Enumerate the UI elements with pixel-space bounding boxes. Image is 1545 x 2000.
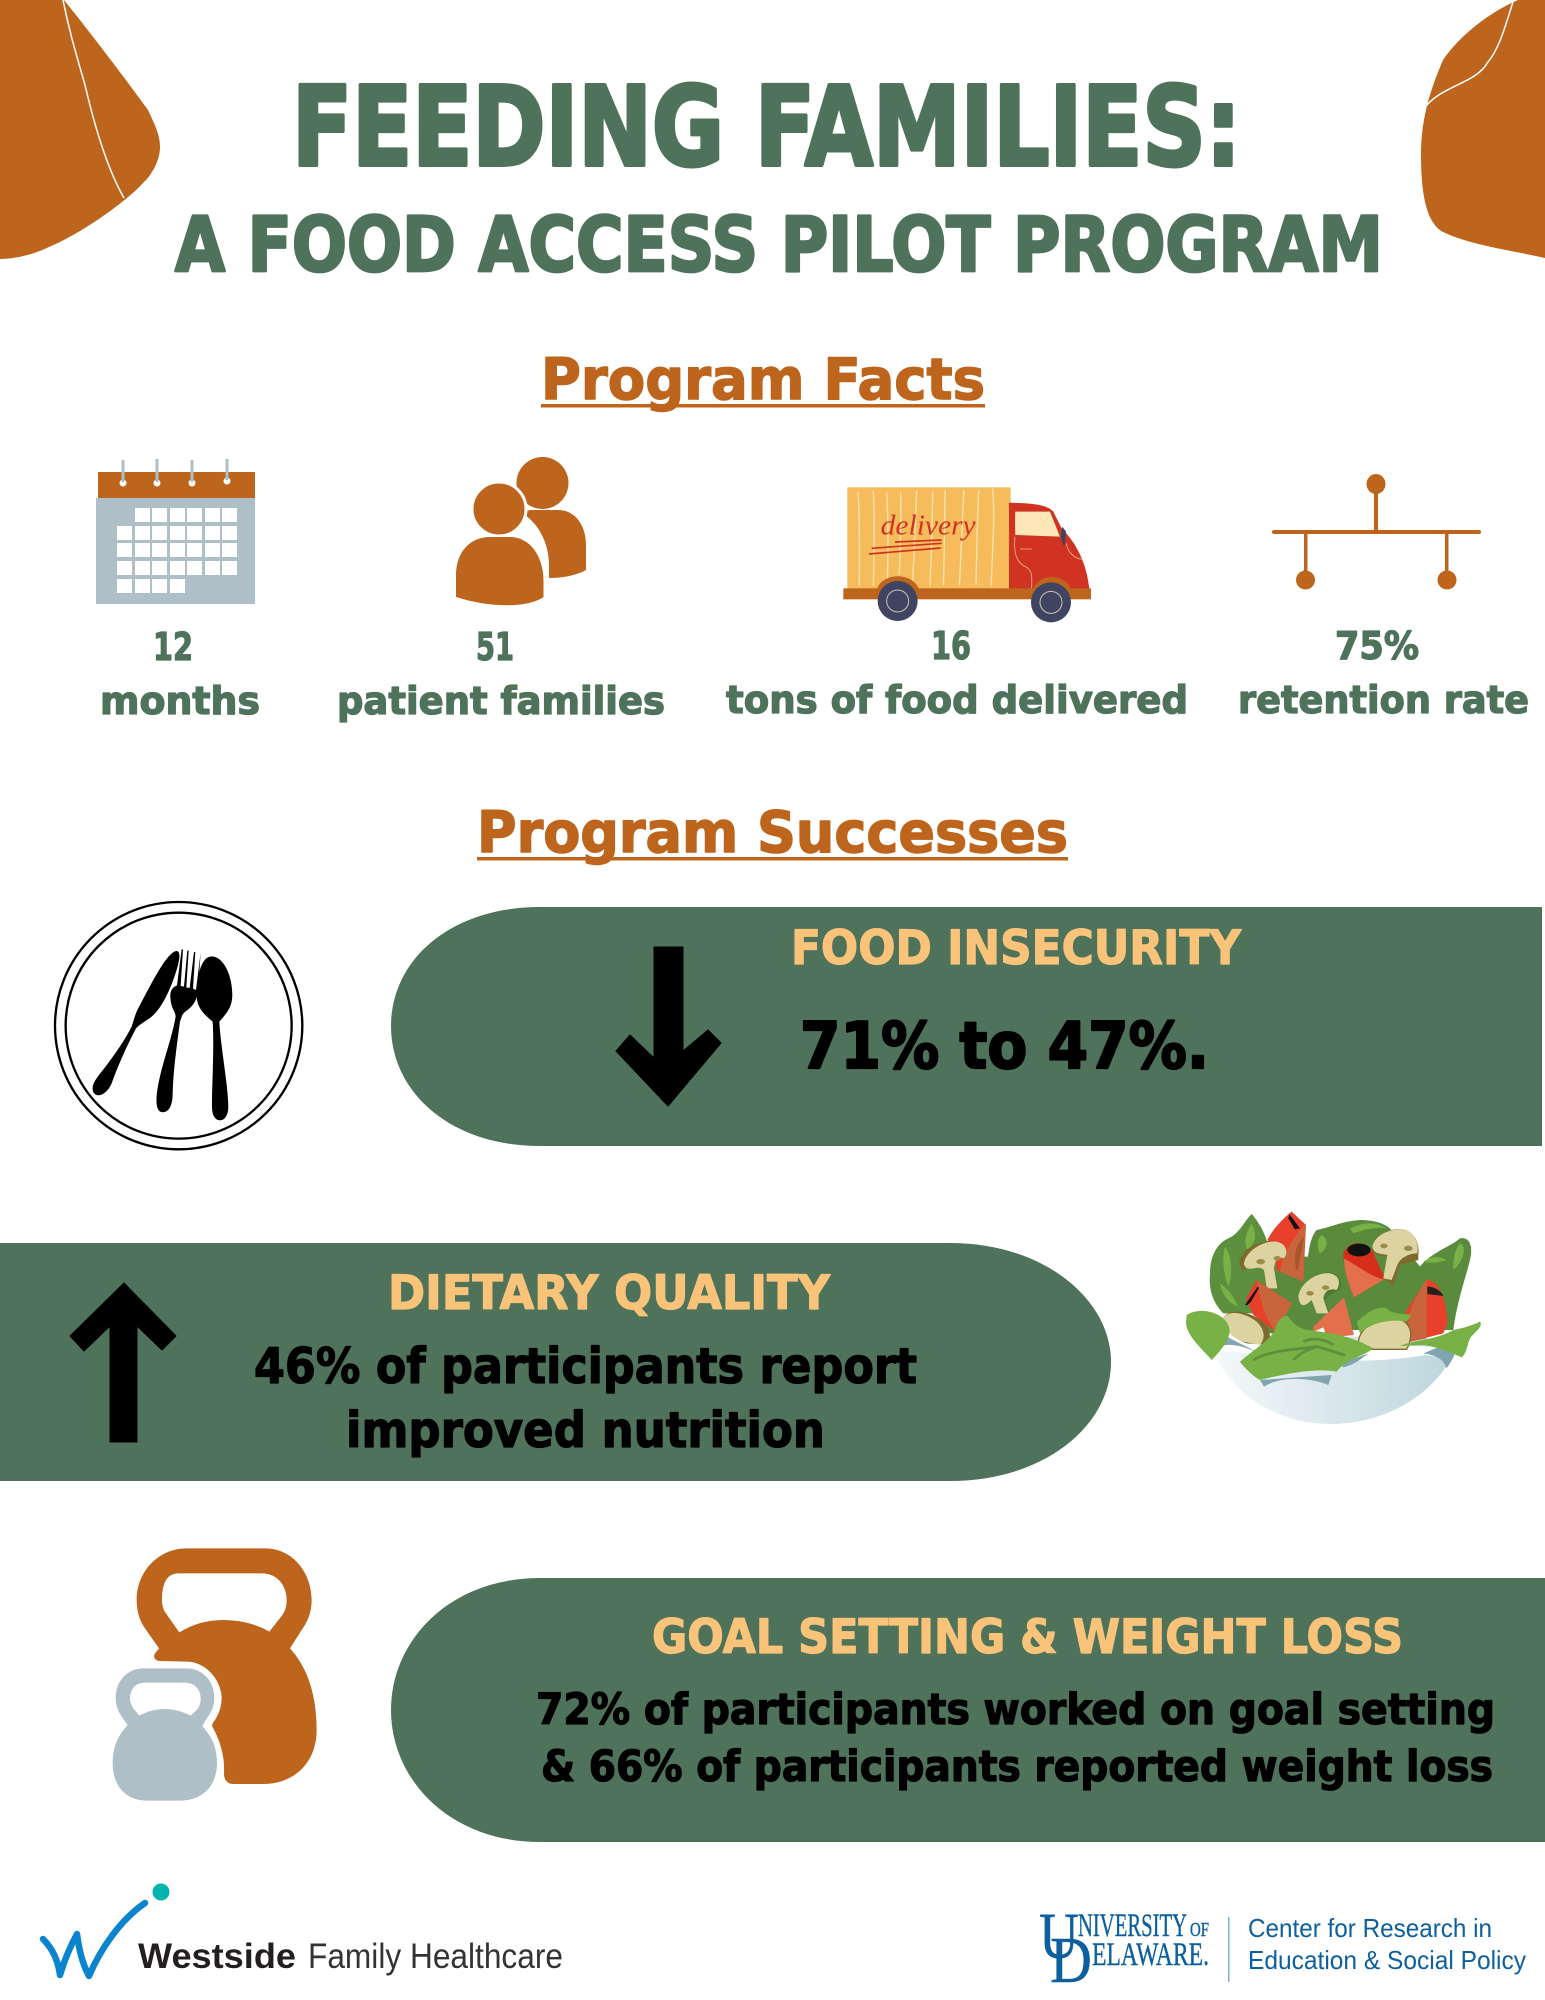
icon: delivery truck: delivery xyxy=(881,509,976,541)
stat: 51 patient families: 51 xyxy=(476,625,514,669)
illustration: salad bowl xyxy=(1186,1212,1481,1424)
stat: 51 patient families: patient families xyxy=(337,679,665,723)
stat: 12 months xyxy=(100,625,260,723)
label: goal setting and weight loss: GOAL SETTING & WEIGHT LOSS xyxy=(652,1610,1403,1665)
logo: Westside Family Healthcare xyxy=(43,1884,563,1976)
stat: 75% retention rate: retention rate xyxy=(1238,678,1529,722)
logo: University of Delaware: ELAWARE. xyxy=(1092,1937,1209,1973)
logo: Westside Family Healthcare: Family Healthcare xyxy=(308,1937,563,1976)
arrow: up xyxy=(70,1283,176,1442)
icon: delivery truck xyxy=(843,487,1091,622)
stat: 12 months: 12 xyxy=(153,625,193,669)
icon: calendar xyxy=(96,459,255,604)
stat: 16 tons of food delivered: tons of food delivered xyxy=(726,678,1188,722)
heading: Program Facts: Program Facts xyxy=(541,347,985,413)
text: dietary quality detail: improved nutrition xyxy=(346,1402,825,1459)
logo: University of Delaware: NIVERSITY xyxy=(1078,1908,1187,1944)
logo: University of Delaware: OF xyxy=(1190,1919,1209,1941)
banner: food insecurity xyxy=(391,907,1542,1146)
decorative blob: top right xyxy=(1421,0,1545,258)
label: food insecurity: FOOD INSECURITY xyxy=(791,921,1242,976)
icon: kettlebells xyxy=(113,1548,317,1801)
banner: goal setting and weight loss xyxy=(391,1578,1545,1842)
stat: 75% retention rate: 75% xyxy=(1335,624,1419,668)
decorative blob: top left xyxy=(0,0,160,259)
logo: University of Delaware: U xyxy=(1039,1900,1079,1973)
stat: 51 patient families xyxy=(337,625,665,723)
stat: 75% retention rate xyxy=(1238,624,1529,722)
stat: 12 months: months xyxy=(100,679,260,723)
text: goal setting detail xyxy=(536,1685,1495,1792)
text: dietary quality detail xyxy=(254,1338,917,1459)
text: Center for Research in Education and Social Policy xyxy=(1228,1913,1526,1982)
text: Center for Research in Education and Social Policy: Center for Research in xyxy=(1248,1913,1492,1943)
logo: Westside Family Healthcare: Westside xyxy=(138,1937,296,1976)
stat: 16 tons of food delivered: 16 xyxy=(931,624,971,668)
banner: dietary quality xyxy=(0,1243,1111,1481)
text: dietary quality detail: 46% of participants report xyxy=(254,1338,917,1395)
stat: 71% to 47%: 71% to 47%. xyxy=(800,1010,1209,1084)
text: Center for Research in Education and Social Policy: Education & Social Policy xyxy=(1248,1945,1526,1975)
logo: University of Delaware xyxy=(1039,1900,1209,1997)
logo: University of Delaware: D xyxy=(1050,1924,1092,1997)
label: dietary quality: DIETARY QUALITY xyxy=(388,1266,831,1321)
stat: 16 tons of food delivered xyxy=(726,624,1188,722)
title: FEEDING FAMILIES: xyxy=(292,63,1241,191)
icon: plate and cutlery xyxy=(55,902,302,1149)
icon: people xyxy=(456,457,586,605)
icon: org chart xyxy=(1272,474,1481,590)
arrow: down xyxy=(616,947,721,1106)
heading: Program Successes: Program Successes xyxy=(477,800,1068,866)
